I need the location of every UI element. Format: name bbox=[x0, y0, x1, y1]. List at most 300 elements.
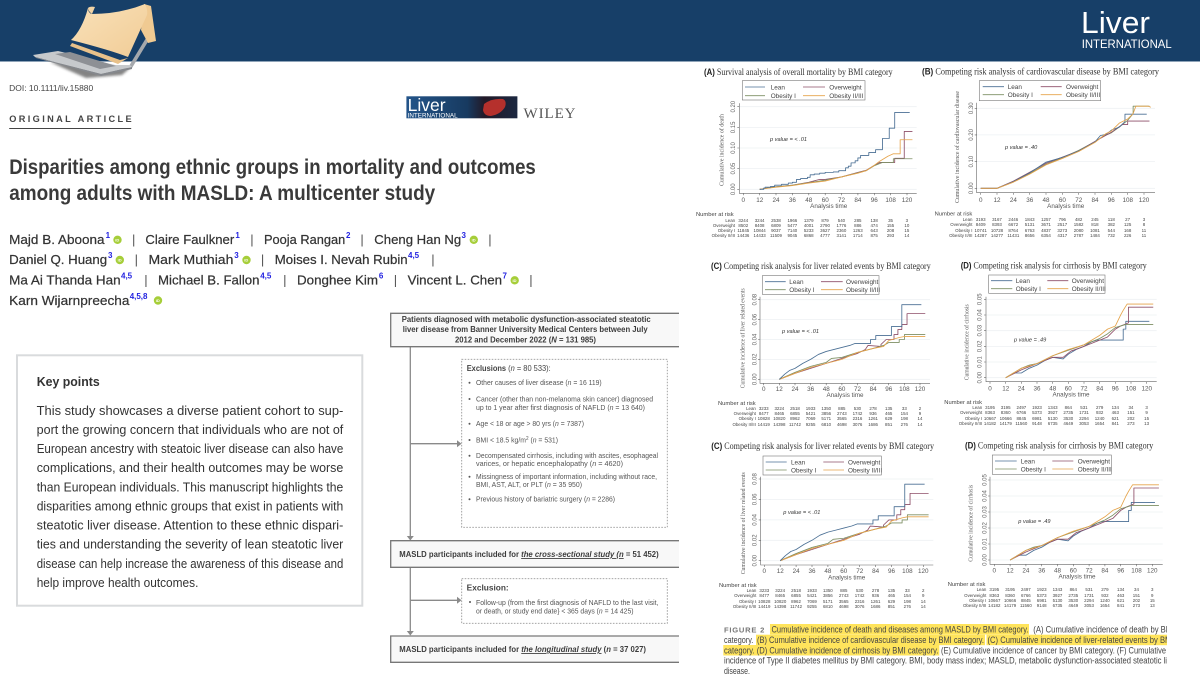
author list: 1 bbox=[106, 231, 111, 240]
key points text: disease can help increase the awareness of this disease and bbox=[37, 557, 343, 571]
chart B number at risk table: 118 bbox=[1108, 217, 1115, 222]
repeated chart C number at risk table: 2743 bbox=[839, 593, 849, 598]
chart A number at risk table: 2360 bbox=[837, 228, 846, 233]
repeated chart C number at risk table: 9 bbox=[922, 593, 924, 598]
repeated chart C number at risk table: 465 bbox=[888, 593, 895, 598]
repeated chart C number at risk table: Obesity I bbox=[739, 599, 756, 604]
caption text bbox=[724, 624, 1174, 675]
author list: 3 bbox=[108, 251, 113, 260]
repeated chart C axes labels: Number at risk bbox=[719, 583, 757, 589]
chart C number at risk table: 154 bbox=[901, 411, 908, 416]
chart B axes labels: 12 bbox=[993, 197, 1001, 204]
flow box: follow-up exclusion bbox=[462, 579, 667, 623]
article type label bbox=[9, 114, 132, 129]
chart D number at risk table: 134 bbox=[1112, 405, 1119, 410]
repeated chart D number at risk table: 8845 bbox=[1021, 598, 1031, 603]
author list: 1 bbox=[235, 231, 240, 240]
chart C number at risk table: 851 bbox=[885, 422, 892, 427]
repeated chart C number at risk table: 4698 bbox=[839, 604, 849, 609]
chart C number at risk table: 3076 bbox=[853, 422, 862, 427]
chart D number at risk table: 273 bbox=[1127, 421, 1135, 426]
chart A number at risk table: Lean bbox=[725, 218, 735, 223]
chart A number at risk table: 2790 bbox=[820, 223, 830, 228]
repeated chart D axes labels: 0.04 bbox=[982, 490, 988, 502]
chart C number at risk table: 278 bbox=[869, 406, 877, 411]
repeated chart C axes labels: 72 bbox=[856, 568, 864, 575]
chart D axes labels: 0.05 bbox=[978, 293, 984, 305]
repeated chart C number at risk table: 936 bbox=[872, 593, 879, 598]
chart D legend: Obesity II/III bbox=[1072, 286, 1106, 293]
chart C number at risk table: 14419 bbox=[758, 422, 770, 427]
repeated chart C axes labels: 96 bbox=[888, 568, 895, 575]
chart C title: (C) Competing risk analysis for liver related events by BMI category bbox=[711, 261, 931, 272]
chart D number at risk table: 1343 bbox=[1048, 405, 1058, 410]
chart B number at risk table: 2446 bbox=[1008, 217, 1018, 222]
chart C number at risk table: 2316 bbox=[853, 416, 862, 421]
repeated chart D axes labels: 12 bbox=[1007, 568, 1014, 575]
chart B title: (B) Competing risk analysis of cardiovascular disease by BMI category bbox=[922, 66, 1159, 78]
key points text: This study showcases a diverse patient cohort to sup- bbox=[37, 404, 343, 418]
chart D legend: Overweight bbox=[1072, 278, 1104, 285]
chart D number at risk table: 6981 bbox=[1032, 416, 1042, 421]
chart C axes labels: 48 bbox=[823, 386, 830, 393]
chart C axes labels: 60 bbox=[838, 386, 846, 393]
chart C number at risk table: 5171 bbox=[821, 416, 831, 421]
chart C number at risk table: 9 bbox=[919, 411, 921, 416]
chart B number at risk table: Overweight bbox=[950, 222, 972, 227]
repeated chart C axes labels: 0.08 bbox=[753, 473, 759, 485]
chart C number at risk table bbox=[732, 406, 922, 427]
chart B axes labels: 0.20 bbox=[969, 128, 975, 141]
repeated chart D axes labels: 0.05 bbox=[982, 474, 988, 486]
chart A axes labels bbox=[696, 100, 913, 218]
chart B number at risk table: 796 bbox=[1059, 217, 1066, 222]
repeated chart D number at risk table: Overweight bbox=[964, 593, 986, 598]
repeated chart D number at risk table: 279 bbox=[1101, 587, 1109, 592]
author list: | bbox=[529, 272, 533, 288]
repeated chart C number at risk table: 10820 bbox=[774, 599, 786, 604]
chart D number at risk table: 6735 bbox=[1048, 421, 1058, 426]
chart A number at risk table: 3627 bbox=[820, 228, 830, 233]
chart C legend: Lean bbox=[789, 279, 804, 286]
key points text: ties and understanding the severity of lean steatotic liver bbox=[37, 538, 343, 552]
repeated chart C number at risk table: 851 bbox=[888, 604, 895, 609]
flow box: exclusions: BMI, AST, ALT, or PLT (n = 35 950) bbox=[476, 480, 582, 489]
repeated chart D number at risk table: Obesity I bbox=[969, 598, 986, 603]
repeated chart C number at risk table: 14 bbox=[921, 604, 926, 609]
flow box: exclusions: Other causes of liver disease (n = 16 119) bbox=[476, 378, 602, 387]
chart A number at risk table: 285 bbox=[854, 218, 861, 223]
chart D axes labels: 72 bbox=[1080, 385, 1088, 392]
author list: 4,5 bbox=[408, 251, 420, 260]
chart D number at risk table: 4649 bbox=[1063, 421, 1073, 426]
author list: iD bbox=[512, 278, 517, 283]
chart D number at risk table bbox=[959, 405, 1149, 426]
author list: | bbox=[431, 252, 435, 267]
key points text: help improve health outcomes. bbox=[37, 576, 198, 590]
chart A number at risk table: 3244 bbox=[755, 218, 765, 223]
chart D number at risk table: 9 bbox=[1145, 410, 1148, 415]
chart A number at risk table: 5233 bbox=[804, 228, 814, 233]
chart A axes labels: 60 bbox=[822, 197, 829, 204]
chart B number at risk table: 3167 bbox=[992, 217, 1002, 222]
author list: | bbox=[261, 252, 264, 267]
chart D number at risk table: 1654 bbox=[1095, 421, 1104, 426]
chart B number at risk table: 544 bbox=[1108, 228, 1115, 233]
repeated chart D number at risk table: 864 bbox=[1070, 587, 1077, 592]
repeated chart C axes labels: 0.00 bbox=[753, 554, 759, 567]
chart C axes labels: 0.06 bbox=[752, 313, 758, 325]
chart B number at risk table bbox=[949, 217, 1146, 238]
repeated chart D number at risk table: 13 bbox=[1150, 603, 1155, 608]
chart C number at risk table: 5421 bbox=[806, 411, 815, 416]
repeated chart C axes labels: 48 bbox=[824, 568, 832, 575]
chart D axes labels: 0.00 bbox=[978, 371, 984, 384]
repeated chart C axes labels: 120 bbox=[918, 568, 929, 575]
chart A number at risk table: Obesity I bbox=[718, 228, 735, 233]
repeated chart C number at risk table: 8477 bbox=[759, 593, 769, 598]
chart D number at risk table: 2497 bbox=[1016, 405, 1026, 410]
repeated chart C number at risk table: 8465 bbox=[775, 593, 785, 598]
chart B number at risk table: 11431 bbox=[1007, 233, 1019, 238]
flow box: exclusions: Previous history of bariatric surgery (n = 2286) bbox=[476, 494, 615, 504]
repeated chart D number at risk table: 3053 bbox=[1084, 603, 1094, 608]
chart B legend: Obesity I bbox=[1008, 92, 1033, 99]
flow box: follow-up exclusion: Follow-up (from the first diagnosis of NAFLD to the last visit, bbox=[476, 598, 658, 607]
chart C number at risk table: Obesity II/III bbox=[732, 422, 756, 427]
chart B number at risk table: 3193 bbox=[976, 217, 986, 222]
chart D axes labels: 0.01 bbox=[978, 356, 984, 368]
chart D number at risk table: Overweight bbox=[960, 410, 982, 415]
caption highlights bbox=[723, 624, 1168, 656]
chart A axes labels: 0.00 bbox=[731, 183, 737, 195]
chart B axes labels: 36 bbox=[1026, 197, 1034, 204]
chart D number at risk table: 8360 bbox=[1001, 410, 1011, 415]
chart B number at risk table: 6763 bbox=[1025, 228, 1035, 233]
repeated chart D number at risk table: 932 bbox=[1101, 593, 1109, 598]
flow box: cross-sectional study bbox=[391, 541, 679, 567]
repeated chart C axes labels: Analysis time bbox=[828, 574, 866, 581]
chart B legend: Overweight bbox=[1066, 84, 1099, 91]
flow box: follow-up exclusion: or death, or study end date} < 365 days (n = 14 425) bbox=[476, 606, 634, 616]
chart B axes labels: Cumulative incidence of cardiovascular disease bbox=[954, 91, 961, 203]
chart D axes labels bbox=[944, 293, 1152, 406]
repeated chart D number at risk table: 3927 bbox=[1053, 593, 1062, 598]
chart B number at risk table: 1582 bbox=[1074, 222, 1084, 227]
chart A number at risk table: 138 bbox=[870, 218, 878, 223]
chart A number at risk table: 14 bbox=[904, 233, 909, 238]
chart D number at risk table: 3530 bbox=[1063, 416, 1073, 421]
flow box: exclusions: 2 bbox=[526, 436, 529, 442]
chart B number at risk table: 8656 bbox=[1025, 233, 1035, 238]
chart A number at risk table: 10 bbox=[904, 223, 909, 228]
chart A title: (A) Survival analysis of overall mortality by BMI category bbox=[704, 67, 893, 78]
chart D axes labels: 108 bbox=[1126, 385, 1137, 392]
chart C number at risk table: 11742 bbox=[789, 422, 801, 427]
chart B number at risk table: 2787 bbox=[1074, 233, 1084, 238]
repeated chart D number at risk table: 463 bbox=[1117, 593, 1124, 598]
chart A number at risk table: Obesity II/III bbox=[712, 233, 735, 238]
chart C axes labels: Cumulative incidence of liver related events bbox=[740, 288, 746, 388]
repeated chart D number at risk table: 6981 bbox=[1037, 598, 1047, 603]
chart C number at risk table: 135 bbox=[885, 406, 892, 411]
repeated chart C number at risk table: 135 bbox=[888, 588, 895, 593]
journal logo: Liver International: INTERNATIONAL bbox=[1082, 39, 1172, 51]
flow box: exclusions: Missingness of important information, including without race, bbox=[476, 472, 657, 481]
chart D number at risk table: Lean bbox=[972, 405, 982, 410]
chart C axes labels: 72 bbox=[854, 386, 861, 393]
chart C number at risk table: 1933 bbox=[806, 406, 815, 411]
chart C number at risk table: 1350 bbox=[821, 406, 831, 411]
repeated chart D axes labels: 0.03 bbox=[982, 506, 988, 518]
chart D number at risk table: 13 bbox=[1144, 421, 1149, 426]
chart C number at risk table: 3233 bbox=[759, 406, 769, 411]
chart A axes labels: Cumulative incidence of death bbox=[718, 114, 726, 186]
author list: Claire Faulkner bbox=[145, 232, 235, 247]
chart C number at risk table: 3224 bbox=[774, 406, 784, 411]
title: Disparities among ethnic groups in mortality and outcomes bbox=[9, 156, 536, 179]
chart C number at risk table: 1686 bbox=[868, 422, 878, 427]
chart C number at risk table: 14398 bbox=[773, 422, 785, 427]
chart A number at risk table bbox=[712, 218, 910, 238]
author list bbox=[9, 231, 533, 308]
chart B number at risk table: 1843 bbox=[1025, 217, 1035, 222]
repeated chart D number at risk table: 151 bbox=[1133, 593, 1140, 598]
chart A number at risk table: 9037 bbox=[771, 228, 781, 233]
repeated chart C number at risk table: 14398 bbox=[774, 604, 786, 609]
chart A legend: Overweight bbox=[829, 84, 862, 91]
repeated chart C number at risk table: 3076 bbox=[855, 604, 865, 609]
repeated chart C number at risk table: 3224 bbox=[775, 588, 785, 593]
repeated chart D number at risk table: 4649 bbox=[1068, 603, 1078, 608]
chart C number at risk table: 1261 bbox=[868, 416, 878, 421]
repeated chart D axes labels: 0 bbox=[993, 568, 997, 575]
chart A axes labels: 0.20 bbox=[731, 100, 737, 113]
chart D number at risk table: 5373 bbox=[1032, 410, 1042, 415]
author list: 3 bbox=[462, 231, 466, 240]
repeated chart D number at risk table: 8360 bbox=[1005, 593, 1015, 598]
chart C axes labels: 0.02 bbox=[752, 353, 758, 365]
flow box: exclusions: ( bbox=[529, 436, 533, 444]
chart D number at risk table: 841 bbox=[1112, 421, 1119, 426]
repeated chart C number at risk table: Overweight bbox=[734, 593, 756, 598]
repeated chart C legend: Obesity I bbox=[791, 467, 816, 474]
chart B axes labels: 60 bbox=[1059, 197, 1066, 204]
repeated chart C axes labels: 36 bbox=[808, 568, 816, 575]
chart B number at risk table: 8764 bbox=[1008, 228, 1018, 233]
chart C axes labels: 24 bbox=[791, 386, 799, 393]
chart B axes labels: 0.10 bbox=[969, 155, 975, 167]
chart B number at risk table: 10741 bbox=[975, 228, 987, 233]
chart B axes labels: 48 bbox=[1042, 197, 1050, 204]
chart C number at risk table: 276 bbox=[901, 422, 908, 427]
caption text: (B) Cumulative incidence of cardiovascular disease by BMI category. bbox=[757, 635, 984, 645]
repeated chart C axes labels: p value = < .01 bbox=[782, 510, 820, 516]
logo: Liver International and Wiley: INTERNATIONAL bbox=[408, 113, 458, 119]
chart B number at risk table: 3671 bbox=[1041, 222, 1051, 227]
chart A number at risk table: 540 bbox=[838, 218, 845, 223]
repeated chart C number at risk table: 6810 bbox=[823, 604, 833, 609]
chart A number at risk table: 6809 bbox=[771, 223, 781, 228]
chart D number at risk table: 10666 bbox=[1000, 416, 1012, 421]
chart B number at risk table: 1257 bbox=[1041, 217, 1051, 222]
chart B axes labels: 108 bbox=[1122, 197, 1133, 204]
chart C axes labels: 120 bbox=[915, 386, 926, 393]
chart A number at risk table: 3244 bbox=[738, 218, 748, 223]
repeated chart D number at risk table: 3 bbox=[1151, 587, 1153, 592]
chart A axes labels: Analysis time bbox=[810, 203, 848, 210]
chart C number at risk table: 465 bbox=[885, 411, 892, 416]
repeated chart C number at risk table: Lean bbox=[747, 588, 756, 593]
chart D number at risk table: 279 bbox=[1096, 405, 1103, 410]
key points text: disparities among ethnic groups that exist in patients with bbox=[37, 499, 343, 513]
key points text: port the growing concern that individuals who are not of bbox=[37, 423, 344, 437]
chart D number at risk table: 3195 bbox=[1001, 405, 1011, 410]
repeated chart C number at risk table: 10828 bbox=[758, 599, 770, 604]
journal logo: Liver International bbox=[1081, 5, 1172, 51]
chart A number at risk table: 8408 bbox=[755, 223, 765, 228]
author list: Pooja Rangan bbox=[264, 232, 345, 247]
chart C legend: Obesity I bbox=[789, 287, 815, 294]
chart C number at risk table: 2743 bbox=[837, 411, 847, 416]
chart B axes labels: Number at risk bbox=[935, 212, 972, 218]
chart D axes labels: 60 bbox=[1065, 385, 1072, 392]
chart A number at risk table: 11845 bbox=[737, 228, 749, 233]
caption text: category. (D) Cumulative incidence of cirrhosis by BMI category. bbox=[724, 645, 938, 655]
article type label: ORIGINAL ARTICLE bbox=[9, 114, 132, 124]
chart C curves bbox=[779, 305, 925, 379]
chart C number at risk table: 6855 bbox=[790, 411, 800, 416]
chart A number at risk table: 886 bbox=[854, 223, 861, 228]
chart C number at risk table: 8465 bbox=[774, 411, 784, 416]
repeated chart D number at risk table: Lean bbox=[977, 587, 986, 592]
repeated chart D number at risk table: 5130 bbox=[1053, 598, 1062, 603]
repeated chart C axes labels: Cumulative incidence of liver related events bbox=[740, 472, 747, 574]
repeated chart D axes labels: 24 bbox=[1022, 568, 1030, 575]
chart B axes labels: 0 bbox=[979, 197, 983, 204]
author list: | bbox=[144, 272, 148, 288]
chart C number at risk table: 10828 bbox=[758, 416, 770, 421]
flow box: exclusions: Exclusions (n = 80 533): bbox=[467, 364, 551, 373]
chart B number at risk table: 3273 bbox=[1057, 228, 1067, 233]
chart B number at risk table: 2080 bbox=[1074, 228, 1084, 233]
key points heading: Key points bbox=[37, 374, 100, 389]
chart C number at risk table: 8962 bbox=[790, 416, 800, 421]
chart C number at risk table: 3565 bbox=[837, 416, 847, 421]
author list: Majd B. Aboona bbox=[9, 232, 105, 247]
author list: Michael B. Fallon bbox=[158, 272, 260, 288]
chart A number at risk table: 4777 bbox=[820, 233, 830, 238]
repeated chart C axes labels bbox=[719, 472, 929, 589]
repeated chart D number at risk table: 621 bbox=[1117, 598, 1124, 603]
repeated chart C axes labels: 108 bbox=[902, 568, 913, 575]
title bbox=[9, 156, 536, 205]
repeated chart C number at risk table: 2518 bbox=[791, 588, 801, 593]
repeated chart C axes labels: 60 bbox=[840, 568, 848, 575]
chart A number at risk table: 7140 bbox=[787, 228, 797, 233]
figure caption bbox=[723, 624, 1174, 675]
flow box: exclusions: Decompensated cirrhosis, including with ascites, esophageal bbox=[476, 451, 658, 460]
chart B number at risk table: 11 bbox=[1142, 233, 1146, 238]
chart C number at risk table: 629 bbox=[885, 416, 892, 421]
chart D legend: Obesity I bbox=[1016, 286, 1041, 293]
author list: Karn Wijarnpreecha bbox=[9, 293, 130, 308]
chart B axes labels: Analysis time bbox=[1047, 203, 1085, 210]
repeated chart C number at risk table: 8962 bbox=[791, 599, 801, 604]
chart D number at risk table: 14179 bbox=[1000, 421, 1012, 426]
chart C number at risk table: Lean bbox=[746, 406, 756, 411]
chart A number at risk table: 10844 bbox=[754, 228, 766, 233]
key points text: European ancestry with steatoic liver disease can also have bbox=[37, 442, 343, 456]
repeated chart D number at risk table: 1240 bbox=[1100, 598, 1110, 603]
repeated chart D legend: Obesity II/III bbox=[1078, 466, 1112, 473]
caption text: (A) Cumulative incidence of death by BMI bbox=[1033, 624, 1174, 634]
chart D number at risk table: 932 bbox=[1096, 410, 1103, 415]
chart B number at risk table: 8409 bbox=[976, 222, 986, 227]
chart D number at risk table: Obesity II/III bbox=[959, 421, 982, 426]
panel: chart C liver related events bbox=[711, 261, 931, 427]
chart D axes labels: 0 bbox=[988, 385, 992, 392]
repeated chart D curves bbox=[1010, 485, 1159, 560]
chart B axes labels: p value = .40 bbox=[1004, 145, 1038, 151]
repeated chart D number at risk table: 202 bbox=[1133, 598, 1140, 603]
chart C number at risk table: 8477 bbox=[759, 411, 769, 416]
author list: iD bbox=[244, 258, 248, 262]
repeated chart D number at risk table: 5373 bbox=[1037, 593, 1047, 598]
repeated chart C axes labels: 84 bbox=[872, 568, 880, 575]
chart D number at risk table: 15 bbox=[1144, 416, 1149, 421]
flow box: longitudinal study: MASLD participants included for the longitudinal study (n = 37 027) bbox=[399, 644, 646, 654]
author list: | bbox=[488, 232, 492, 247]
repeated chart D axes labels: 72 bbox=[1086, 568, 1093, 575]
repeated chart D axes labels: Cumulative incidence of cirrhosis bbox=[968, 484, 974, 562]
repeated chart C title: (C) Competing risk analysis for liver related events by BMI category bbox=[711, 441, 934, 452]
repeated chart D axes labels: 96 bbox=[1117, 568, 1125, 575]
key points text: complications, and their health outcomes may be worse bbox=[37, 461, 343, 475]
author list: | bbox=[360, 232, 364, 247]
repeated chart D number at risk table: 1923 bbox=[1037, 587, 1047, 592]
repeated chart D number at risk table: 2497 bbox=[1021, 587, 1031, 592]
chart A axes labels: 0.15 bbox=[731, 121, 737, 133]
chart B number at risk table: 226 bbox=[1124, 233, 1131, 238]
flow box: exclusions: BMI < 18.5 kg/m bbox=[476, 436, 529, 444]
author list: Mark Muthiah bbox=[148, 252, 233, 267]
chart A axes labels: 108 bbox=[885, 197, 896, 204]
chart C axes labels: 36 bbox=[807, 386, 815, 393]
chart C number at risk table: Overweight bbox=[734, 411, 756, 416]
chart B axes labels: 72 bbox=[1075, 197, 1083, 204]
chart A number at risk table: 5477 bbox=[787, 223, 797, 228]
chart C legend: Obesity II/III bbox=[846, 287, 880, 294]
flow box: follow-up exclusion: Exclusion: bbox=[467, 584, 509, 592]
caption text: FIGURE 2 bbox=[724, 626, 764, 634]
chart C number at risk table: 6810 bbox=[821, 422, 831, 427]
repeated chart D legend: Obesity I bbox=[1021, 466, 1046, 473]
chart C axes labels bbox=[718, 288, 926, 407]
repeated chart C axes labels: 0.04 bbox=[753, 513, 759, 526]
chart D number at risk table: 10667 bbox=[984, 416, 996, 421]
repeated chart C legend: Obesity II/III bbox=[848, 467, 882, 474]
chart A number at risk table: 474 bbox=[870, 223, 878, 228]
chart D number at risk table: 9148 bbox=[1032, 421, 1042, 426]
repeated chart C number at risk table: 9255 bbox=[807, 604, 817, 609]
chart A number at risk table: 1714 bbox=[853, 233, 863, 238]
key points text: than European individuals. This manuscript highlights the bbox=[37, 480, 343, 494]
chart C number at risk table: 10820 bbox=[773, 416, 785, 421]
repeated chart D number at risk table: 1731 bbox=[1084, 593, 1094, 598]
repeated chart C number at risk table: 5171 bbox=[823, 599, 833, 604]
repeated chart C number at risk table: 1261 bbox=[871, 599, 880, 604]
